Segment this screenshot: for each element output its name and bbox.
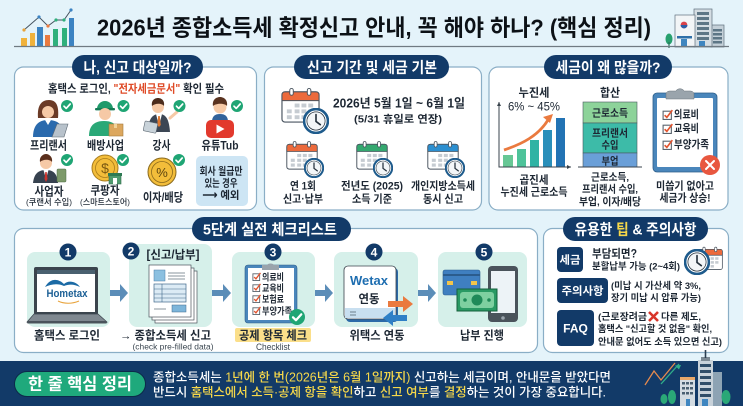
heading: five step checklist [192,217,351,241]
label: interest and dividends: 이자/배당 [143,190,183,204]
panel: who must file [14,55,256,210]
label: proceed with payment: 납부 진행 [460,328,504,342]
filing dates: (5/31 휴일로 연장) [354,112,442,126]
icon: wetax book with arrows: Wetax [350,274,388,288]
label: once a year [283,178,323,206]
icon: deduction clipboard: 부양가족 [674,137,709,151]
icon: card, cash and phone [443,266,518,322]
label: wetax link: 위택스 연동 [350,328,404,342]
step 1: hometax login [27,244,110,327]
banner: one line summary [0,350,743,406]
label: comprehensive tax filing: (check pre-filled data) [132,342,214,352]
label: seller: 쿠팡자 [90,184,120,198]
label: seller [80,184,130,207]
step 2: comprehensive income filing [122,242,212,327]
label: deduction items check [235,328,311,352]
icon: checklist clipboard: 보험료 [262,294,284,306]
icon: deduction clipboard: 의료비 [674,108,699,121]
badge: number 5: 5 [481,246,488,260]
icon: percent coin: % [156,165,168,180]
chart: income stack: 프리랜서 [592,126,628,140]
tip: late payment caution: (미납 시 가산세 약 3%, [611,280,701,292]
icon: checklist clipboard [245,264,305,325]
panel: why tax is high [489,55,728,210]
badge: number 1: 1 [65,246,72,260]
icon: wetax book with arrows: 연동 [358,292,380,306]
label: progressive earned income: 곱진세 [520,174,548,186]
title: 2026년 종합소득세 확정신고 안내, 꼭 해야 하나? (핵심 정리) [97,14,651,40]
tip: late payment caution: 주의사항 [562,284,604,298]
summary text [153,370,611,400]
label: tax increases without deductions: 미씁기 없아고 [656,178,714,192]
badge: one line summary [14,372,146,396]
filing dates: 2026년 5월 1일 ~ 6월 1일 [333,96,465,110]
icon: deduction clipboard: 교육비 [674,122,699,135]
chart: rising progressive tax [497,102,571,169]
summary text: 종합소득세는 1년에 한 번(2026년은 6월 1일까지) 신고하는 세금이며, 안내문을 받았다면 [153,370,611,384]
heading: tips and cautions [563,217,708,241]
label: local income tax [411,180,475,206]
panel: five step checklist [14,217,538,352]
label: comprehensive tax filing: → 종합소득세 신고 [120,328,211,342]
label: progressive rate [508,86,560,114]
icon: coin and store [92,154,129,184]
label: income sources: 프리랜서 수입, [582,182,638,196]
icon: delivery worker [89,100,130,136]
icon: stacked documents [149,265,197,323]
tip: FAQ: (근로장려금 [598,311,647,323]
step 5: payment [438,244,527,327]
icon: large calendar with clock [282,88,328,133]
label: tax increases without deductions: 세금가 상승! [660,190,710,204]
icon: blue calendar [428,142,464,177]
panel: filing period [264,55,482,210]
icon: laptop with hometax: Hometax [46,288,88,300]
label: income sources [579,172,641,208]
callout: salaried exception [196,156,248,206]
label: comprehensive tax filing [120,328,214,352]
label: prior year income: 소득 기준 [352,192,392,206]
badge: number 3: 3 [270,246,277,260]
tip: installment payment [557,247,680,272]
tip: installment payment: 부담되면? [592,248,637,260]
label: youtube: 유튜Tub [202,138,238,152]
heading: filing period [294,55,449,79]
tip: FAQ [557,310,722,348]
badge: number 2: 2 [128,244,135,258]
label: progressive rate: 6% ~ 45% [508,102,560,114]
icon: checklist clipboard: 부양가족 [262,306,292,318]
arrow: step 1 to 2 [110,284,128,302]
heading: why tax is high [544,55,672,79]
label: once a year: 신고·납부 [283,192,323,206]
tip: installment payment: 세금 [560,254,580,266]
label: hometax login: 홈택스 로그인 [34,328,100,342]
title bar [14,8,729,48]
heading: five step checklist: 5단계 실전 체크리스트 [203,222,337,238]
icon: growth bar chart [21,8,74,47]
label: prior year income: 전년도 (2025) [341,178,403,192]
callout: salaried exception: ⟶ 예외 [202,188,240,202]
label: local income tax: 동시 신고 [423,192,463,206]
label: local income tax: 개인지방소득세 [411,180,475,192]
icon: freelancer [33,100,73,137]
arrow: step 3 to 4 [315,284,333,302]
label: lecturer: 강사 [152,138,170,152]
icon: government building with flag [666,9,724,48]
panel: tips and cautions [544,217,728,352]
tip: late payment caution [557,278,701,304]
chart: income stack: 수입 [602,138,618,152]
icon: checklist clipboard: 교육비 [262,282,284,294]
callout: salaried exception: 회사 월급만 [200,164,243,178]
icon: wetax book with arrows [344,266,413,326]
label: delivery business: 배방사업 [87,138,124,152]
label: seller: (스마트스토어) [80,197,130,207]
heading: who must file [72,55,203,79]
label: progressive earned income: 누진세 근로소득 [500,186,568,198]
badge: one line summary: 한 줄 핵심 정리 [28,374,132,394]
tip: FAQ: FAQ [563,322,588,336]
label: filing and payment: [신고/납부] [146,248,200,262]
label: business owner: 사업자 [34,184,64,198]
summary text: 반드시 홈택스에서 소득·공제 항을 확인하고 신고 여부를 결정하는 것이 가장 중요합니다. [153,384,606,400]
icon: checklist clipboard: 의료비 [262,272,284,284]
label: freelancer: 프리랜서 [30,138,67,152]
label: income sources: 근로소득, [591,172,629,184]
arrow: step 4 to 5 [418,284,436,302]
icon: business owner [33,154,73,183]
icon: green calendar [357,142,392,177]
label: prior year income [341,178,403,206]
label: combined: 합산 [600,86,620,100]
subheading: log in to hometax: 홈택스 로그인, "전자세금문서" 확인 필수 [48,82,224,96]
label: business owner [26,184,72,207]
step 4: wetax link [334,244,418,327]
filing dates [333,96,465,126]
icon: calendar and clock [685,247,722,274]
tip: FAQ: 홈택스 "신고할 것 없음" 확인, [598,323,712,335]
arrow: step 2 to 3 [212,284,231,302]
tip: FAQ: 안내문 없어도 소득 있으면 신고) [598,336,722,348]
chart: income stack: 근로소득 [592,108,628,120]
heading: tips and cautions: 유용한 팁 & 주의사항 [574,222,697,238]
icon: percent coin [148,154,185,186]
icon: deduction clipboard [653,89,720,175]
tip: FAQ: 다른 제도, [661,311,701,323]
tip: installment payment: 분할납부 가능 (2~4회) [592,260,680,272]
icon: youtuber [206,97,243,138]
chart: income stack: 부업 [602,154,618,168]
label: deduction items check: Checklist [256,342,290,352]
label: progressive earned income [500,174,568,198]
label: income sources: 부업, 이자/배당 [579,195,641,208]
label: progressive rate: 누진세 [518,86,550,100]
icon: orange calendar [287,142,323,177]
label: once a year: 연 1회 [290,178,316,192]
icon: city skyline with trend line [645,350,730,406]
label: tax increases without deductions [656,178,714,204]
badge: number 4: 4 [371,246,378,260]
icon: lecturer [143,98,186,133]
heading: why tax is high: 세금이 왜 많을까? [556,60,660,76]
tip: late payment caution: 장기 미납 시 압류 가능) [611,292,701,304]
heading: who must file: 나, 신고 대상일까? [84,60,192,76]
chart: income stack [578,102,642,168]
callout: salaried exception: 있는 경우 [204,178,238,190]
heading: filing period: 신고 기간 및 세금 기본 [307,60,437,76]
icon: coin and store: $ [101,160,109,176]
step 3: deduction checklist [232,244,315,327]
label: deduction items check: 공제 항목 체크 [239,328,307,342]
label: business owner: (쿠랜서 수입) [26,197,72,207]
